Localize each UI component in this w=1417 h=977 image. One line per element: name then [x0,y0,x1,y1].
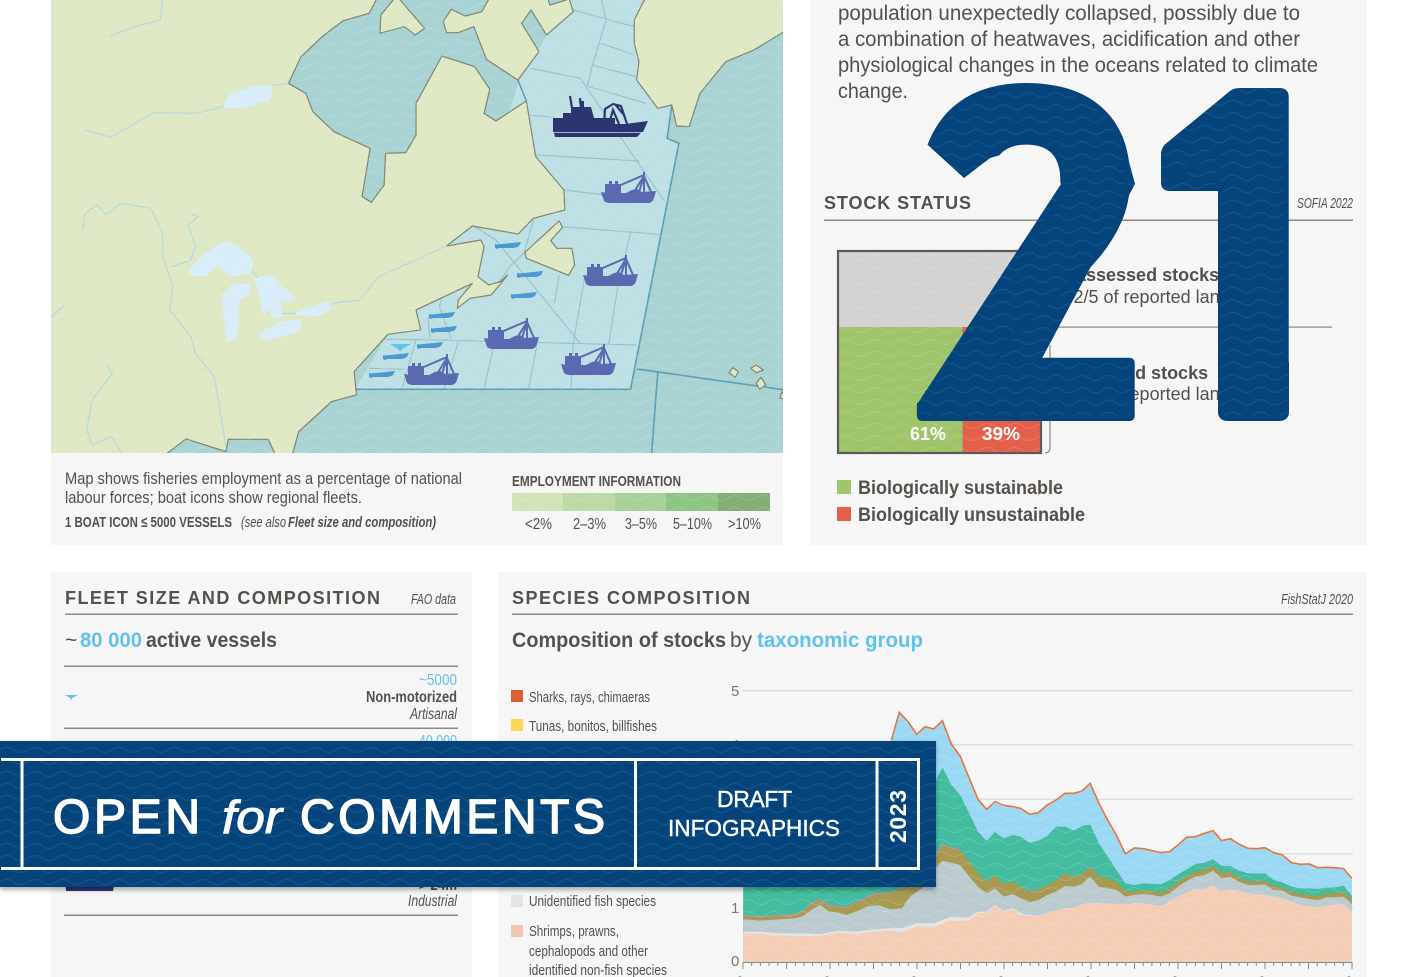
text block: assessed stocks labels: ~3/5 of reported landings [1063,384,1263,404]
chart: stacked area of stocks: 4 [731,737,739,754]
legend: employment information: EMPLOYMENT INFORMATION [512,473,681,490]
text: active vessels: active vessels [146,629,277,652]
subheading: composition of stocks: taxonomic group [757,629,923,652]
text block: assessed stocks labels: Assessed stocks [1062,363,1208,383]
subheading: composition of stocks [512,629,923,652]
fleet row: industrial: Industrial [408,893,457,910]
legend: taxonomic groups: Shrimps, prawns, [529,923,619,940]
map caption [65,470,462,531]
chart: stacked area of stocks [718,683,1358,977]
text block: assessed stocks labels: ~2/5 of reported landings [1063,287,1263,307]
panel: map [45,0,790,545]
banner title: COMMENTS [300,791,605,844]
legend: employment information: <2% [525,516,552,533]
map caption: Fleet size and composition) [288,515,436,531]
chart: stock status proportion boxes: 61% [910,424,946,444]
icon: motorized small boats [369,242,543,378]
legend: employment information: 2–3% [573,516,606,533]
legend: sustainability: Biologically unsustainable [858,505,1085,526]
banner title [53,791,605,844]
subheading: composition of stocks: by [730,629,752,652]
heading: stock status: SOFIA 2022 [1297,195,1353,212]
fleet row: non-motorized [64,672,458,750]
banner year: 2023 [885,790,911,843]
text block: assessed stocks labels [1050,265,1332,404]
panel: stock status [810,0,1367,545]
banner frame [1,760,918,868]
banner title: for [222,791,284,843]
heading: species composition [512,588,1353,615]
banner: open for comments [0,741,936,890]
text: active vessels: 80 000 [80,629,142,652]
heading: species composition: SPECIES COMPOSITION [512,588,750,608]
text: active vessels [64,629,458,667]
heading: stock status [824,193,1353,221]
legend: employment information: >10% [728,516,761,533]
map: ocean [168,0,783,453]
heading: fleet size: FLEET SIZE AND COMPOSITION [65,588,380,608]
page number: 21: 1 [1114,0,1369,518]
heading: species composition: FishStatJ 2020 [1281,591,1353,608]
page number: 21: 2 [907,0,1147,516]
icon: trawler boats [404,172,656,385]
page number: 21 [916,83,1289,421]
fleet row: non-motorized: Artisanal [409,706,457,723]
legend: sustainability [837,478,1085,526]
chart: stacked area of stocks: 0 [731,953,739,970]
icon: non-motorized boat [390,344,411,352]
legend: employment information [512,473,770,533]
panel: fleet size and composition [51,572,472,977]
text block: intro paragraph: population unexpectedly collapsed, possibly due to [838,2,1300,25]
map caption: (see also [241,515,286,531]
banner subtitle [668,786,840,841]
legend: employment information: 3–5% [625,516,657,533]
subheading: composition of stocks: Composition of stocks [512,629,726,652]
text: active vessels: ~ [65,629,77,652]
map caption: Map shows fisheries employment as a percentage of national [65,470,462,488]
chart: stock status proportion boxes [838,251,1050,453]
banner title: OPEN [53,791,200,844]
fleet row: non-motorized: Non-motorized [366,689,457,706]
map: land and economic zone [45,0,790,457]
heading: fleet size [65,588,458,615]
icon: industrial vessel [553,96,648,137]
map caption: 1 BOAT ICON ≤ 5000 VESSELS [65,514,232,531]
legend: employment information: 5–10% [673,516,712,533]
fleet row: industrial [64,877,458,916]
heading: stock status: STOCK STATUS [824,193,971,213]
fleet row: non-motorized: 40 000 [419,733,457,750]
text block: assessed stocks labels: Unassessed stocks [1052,265,1219,285]
chart: stacked area of stocks: 5 [731,683,739,700]
text block: intro paragraph [838,2,1318,103]
chart: stock status proportion boxes: 39% [982,424,1020,444]
chart: x axis ticks [743,962,1352,969]
fleet row: industrial: > 24m [419,877,457,894]
fleet row: non-motorized: ~5000 [419,672,457,689]
legend: taxonomic groups [511,689,667,977]
text block: intro paragraph: a combination of heatwaves, acidification and other [838,28,1300,51]
chart: x axis year labels [738,976,1351,977]
chart: stacked area of stocks: 1 [731,900,739,917]
map caption: labour forces; boat icons show regional fleets. [65,489,362,507]
banner subtitle: DRAFT [717,786,792,812]
heading: fleet size: FAO data [411,591,456,608]
panel: species composition [498,572,1367,977]
legend: taxonomic groups: Sharks, rays, chimaeras [529,689,650,706]
text block: intro paragraph: physiological changes in the oceans related to climate [838,54,1318,77]
legend: taxonomic groups: Tunas, bonitos, billfishes [529,718,657,735]
legend: sustainability: Biologically sustainable [858,478,1063,499]
legend: taxonomic groups: Unidentified fish species [529,893,656,910]
banner subtitle: INFOGRAPHICS [668,815,840,841]
text block: intro paragraph: change. [838,80,908,103]
legend: taxonomic groups: cephalopods and other [529,943,648,960]
